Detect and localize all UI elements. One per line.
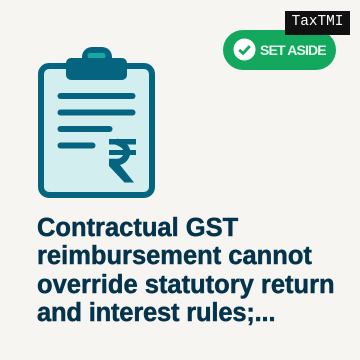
icon: check circle — [234, 38, 256, 60]
rupee symbol — [109, 139, 136, 182]
title: Contractual GST — [37, 214, 238, 242]
badge: set aside — [223, 30, 336, 70]
clipboard board — [41, 66, 152, 195]
text lines — [58, 93, 136, 148]
title: override statutory return — [37, 271, 335, 299]
title — [37, 214, 335, 327]
title: reimbursement cannot — [37, 242, 312, 270]
title: and interest rules;... — [37, 299, 275, 327]
logo: TaxTMI — [285, 11, 350, 35]
clipboard clip — [66, 47, 127, 80]
badge label: SET ASIDE — [260, 42, 326, 58]
logo: TaxTMI: TaxTMI — [292, 14, 343, 30]
